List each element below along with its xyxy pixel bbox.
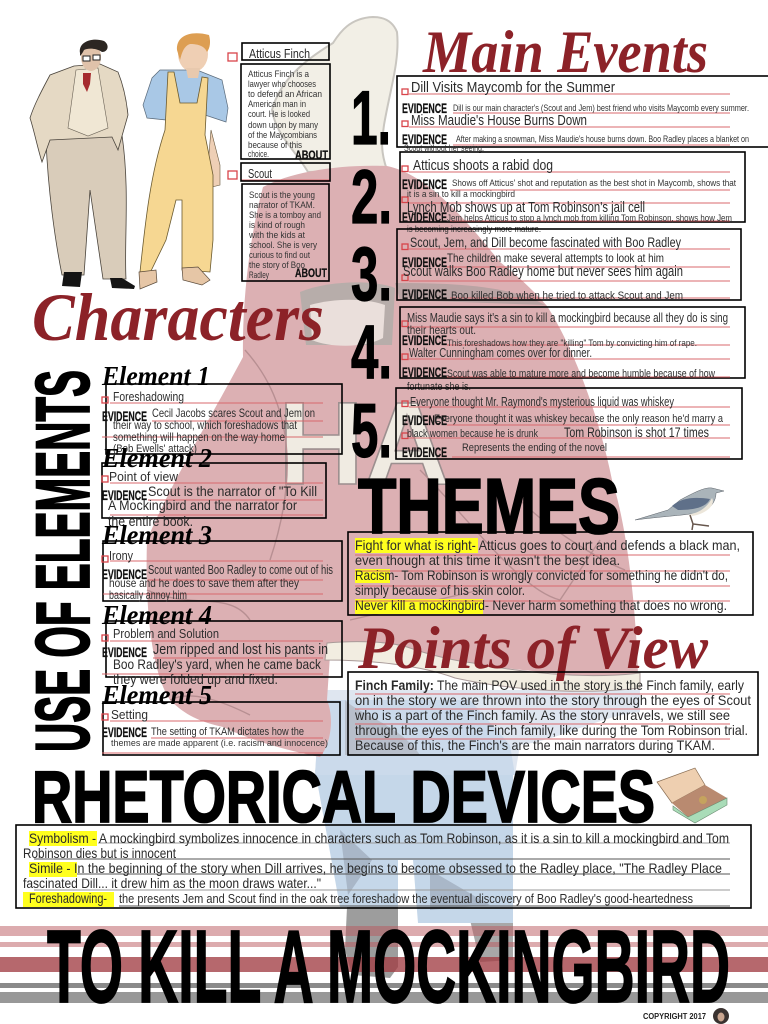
panel: element 4: EVIDENCE [102,644,147,660]
panel: main event 1: Miss Maudie's House Burns Down [411,112,587,129]
background illustration: faded figure in red hoodie [147,17,640,978]
panel: main event 4: This foreshadows how they are "killing" Tom by convicting him of rape. [447,338,697,349]
panel: element 4 [101,600,342,687]
panel: Scout about: the story of Boo [249,260,305,271]
panel: Atticus Finch about: choice. [248,149,269,160]
panel: element 2: Point of view [109,469,179,484]
bottom stripes [0,926,768,1003]
panel: element 5: Setting [111,707,148,722]
panel: main event 2: EVIDENCE [402,176,447,192]
panel: element 4: Jem ripped and lost his pants in [153,641,328,658]
heading: Points of View: Points of View [357,615,709,681]
panel: Scout about: narrator of TKAM. [249,200,315,211]
copyright [643,1008,729,1024]
panel: element 2: the entire book. [108,513,193,529]
panel: element 2: Scout is the narrator of "To Kill [148,483,317,499]
panel: element 5: EVIDENCE [102,724,147,740]
panel: element 4: Element 4 [101,600,212,630]
panel: main event 4: Walter Cunningham comes over for dinner. [409,345,592,360]
panel: main event 3: EVIDENCE [402,286,447,302]
panel: main event 5: Represents the ending of the novel [462,442,607,454]
panel: element 2 [101,443,326,529]
panel: element 4: they were folded up and fixed. [113,671,278,687]
panel: main event 3: Boo killed Bob when he tried to attack Scout and Jem [451,290,683,302]
background illustration: faded figure in red hoodie: HA [278,378,450,510]
panel: Atticus Finch name: Atticus Finch [249,46,310,61]
panel: Scout about: She is a tomboy and [249,210,321,221]
panel: Atticus Finch about: down upon by many [248,120,318,131]
panel: Atticus Finch about: lawyer who chooses [248,79,316,90]
panel: element 1: Foreshadowing [113,389,184,404]
panel: element 3: Scout wanted Boo Radley to come out of his [148,562,333,577]
panel: main event 3: The children make several attempts to look at him [447,251,664,265]
panel: themes [348,532,753,615]
panel: element 5: themes are made apparent (i.e. racism and innocence) [111,738,328,749]
panel: main event 2: is becoming increasingly more mature. [407,224,541,235]
panel: main event 1: EVIDENCE [402,100,447,116]
panel: main event 1: EVIDENCE [402,131,447,147]
event number 4: 4. [351,310,392,395]
panel: main event 5: Everyone thought Mr. Raymond's mysterious liquid was whiskey [410,395,675,409]
panel: element 5: Element 5 [101,680,212,710]
panel: main event 2: Atticus shoots a rabid dog [413,157,553,174]
panel: element 5: The setting of TKAM dictates how the [151,726,304,738]
panel: Scout name: Scout [248,166,272,181]
copyright: COPYRIGHT 2017 [643,1012,707,1021]
panel: element 5 [101,680,340,755]
panel: rhetorical devices: Robinson dies but is innocent [23,845,176,861]
heading: Main Events: Main Events [422,19,708,85]
panel: Scout about: ABOUT [295,266,327,280]
event number 5: 5. [351,389,392,474]
panel: main event 3: Scout, Jem, and Dill become fascinated with Boo Radley [410,234,681,250]
panel: Scout about: with the kids at [248,230,305,241]
panel: Atticus Finch name [228,43,330,61]
panel: element 4: Boo Radley's yard, when he came back [113,656,322,672]
panel: Scout about: Scout is the young [249,190,315,201]
panel: Atticus Finch about: to defend an African [248,89,322,100]
panel: main event 5: Tom Robinson is shot 17 times [564,424,709,440]
panel: element 3 [101,520,342,602]
panel: main event 1 [397,76,768,154]
panel: main event 2: Lynch Mob shows up at Tom Robinson's jail cell [407,199,645,216]
panel: rhetorical devices: Foreshadowing- [29,890,107,906]
panel: main event 4: fortunate she is. [407,381,471,393]
panel: themes: Never kill a mockingbird- Never harm something that does no wrong. [355,597,727,613]
panel: element 1: Cecil Jacobs scares Scout and Jem on [152,406,315,420]
panel: main event 4 [400,307,745,393]
heading: Characters: Characters [32,279,324,355]
panel: Scout about: is kind of rough [249,220,305,231]
panel: rhetorical devices [16,825,751,908]
panel: main event 3: Scout walks Boo Radley home but never sees him again [403,263,683,280]
panel: Atticus Finch about: ABOUT [295,148,329,162]
panel: main event 4: EVIDENCE [402,332,447,348]
panel: element 3: house and he does to save them after they [109,576,299,590]
panel: rhetorical devices: fascinated Dill... it drew him as the moon draws water..." [23,875,321,891]
icon: mockingbird [635,488,724,530]
panel: main event 2: EVIDENCE [402,209,447,225]
panel: main event 3: EVIDENCE [402,254,447,270]
panel: Scout name [228,163,330,181]
panel: element 1: Element 1 [101,361,210,391]
panel: Atticus Finch about: American man in [248,99,306,110]
panel: points of view: who is a part of the Finch family. As the story unravels, we still see [354,707,730,723]
panel: main event 2 [400,152,745,235]
panel: points of view: Because of this, the Finch's are the main narrators during TKAM. [355,737,715,753]
panel: element 2: Element 2 [101,443,212,473]
panel: element 1: EVIDENCE [102,408,147,424]
panel: main event 5: EVIDENCE [402,444,447,460]
panel: main event 5: black women because he is drunk [407,428,538,440]
panel: element 3: EVIDENCE [102,566,147,582]
panel: main event 4: EVIDENCE [402,364,447,380]
panel: Atticus Finch about: Atticus Finch is a [248,69,310,80]
panel: Scout about: curious to find out [249,250,310,261]
panel: element 3: basically annoy him [109,588,187,602]
character illustration: Scout [139,33,228,289]
heading: Themes: THEMES [358,462,620,550]
vertical heading: Use of Elements: USE OF ELEMENTS [21,370,106,752]
panel: Scout about: school. She is very [249,240,317,251]
panel: element 1: their way to school, which foreshadows that [113,418,298,432]
panel: themes: simply because of his skin color. [355,582,525,598]
panel: Scout about [242,184,329,281]
panel: themes: even though at this time it wasn't the best idea. [355,552,620,568]
panel: main event 1: Scout without her seeing. [404,143,484,154]
panel: Atticus Finch about: because of this [248,140,302,151]
event number 2: 2. [351,155,392,240]
panel: main event 4: their hearts out. [407,323,476,337]
panel: points of view [348,672,758,755]
event number 3: 3. [351,232,392,317]
panel: element 2: A Mockingbird and the narrator for [108,497,297,513]
panel: element 1 [101,361,342,455]
panel: element 1: (Bob Ewells' attack) [113,443,197,455]
panel: Atticus Finch about: of the Maycombians [248,130,317,141]
panel: Atticus Finch about [241,64,330,162]
panel: element 1: something will happen on the way home [113,430,285,444]
panel: element 2: EVIDENCE [102,487,147,503]
panel: main event 2: it is a sin to kill a mockingbird [407,189,515,200]
panel: Scout about: Radley [249,270,269,281]
panel: Atticus Finch about: court. He is looked [248,109,310,120]
icon: oak tree box [657,768,727,823]
panel: main event 1: Dill Visits Maycomb for the Summer [411,79,615,96]
panel: main event 3 [397,229,741,302]
panel: element 4: Problem and Solution [113,626,219,641]
panel: main event 5: EVIDENCE [402,412,447,428]
panel: main event 5 [396,388,742,460]
panel: element 3: Element 3 [101,520,212,550]
character illustration: Atticus Finch [30,40,135,289]
event number 1: 1. [351,76,391,161]
panel: element 3: Irony [109,548,133,563]
